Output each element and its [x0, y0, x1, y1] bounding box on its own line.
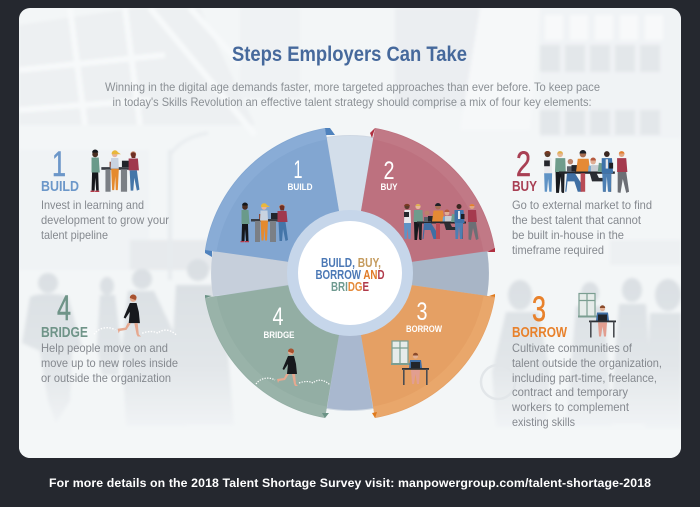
bridge description [41, 341, 178, 385]
panel: build [41, 145, 169, 242]
build wheel number: 1 [294, 156, 302, 184]
center text: BORROW AND [316, 267, 384, 282]
borrow description: workers to complement [511, 400, 630, 414]
center text: BRIDGE [331, 279, 369, 294]
build description: development to grow your [41, 213, 169, 227]
buy wheel label: BUY [380, 182, 398, 193]
segment: bridge [205, 285, 339, 418]
bridge description: Help people move on and [41, 341, 168, 355]
bridge number: 4 [57, 289, 71, 328]
build description: Invest in learning and [41, 198, 144, 212]
buy description: Go to external market to find [512, 198, 652, 212]
build heading: BUILD [41, 179, 79, 195]
buy description [512, 198, 652, 257]
center text [316, 255, 384, 294]
icon: buy team [544, 150, 629, 193]
intro text [105, 80, 600, 109]
title: Steps Employers Can Take [232, 43, 467, 66]
icon: borrow worker [391, 341, 429, 385]
bridge heading: BRIDGE [41, 325, 88, 341]
buy description: timeframe required [512, 243, 604, 257]
inner ring [287, 210, 413, 336]
build description: talent pipeline [41, 228, 108, 242]
borrow number: 3 [532, 290, 546, 329]
bridge wheel label: BRIDGE [264, 330, 294, 341]
panel: bridge [41, 289, 178, 385]
buy description: the best talent that cannot [512, 213, 642, 227]
build number: 1 [52, 145, 66, 184]
segment: buy [361, 128, 495, 262]
build description [41, 198, 169, 242]
icon: bridge runner [94, 295, 177, 337]
footer: For more details on the 2018 Talent Shortage Survey visit: manpowergroup.com/talent-shortage-2018 [49, 476, 651, 490]
segment: borrow [361, 285, 495, 418]
icon: build team [240, 202, 288, 242]
wheel diagram [205, 128, 495, 418]
buy number: 2 [516, 145, 531, 184]
buy description: be built in-house in the [512, 228, 624, 242]
icon: borrow worker [578, 294, 616, 338]
bridge wheel number: 4 [272, 303, 284, 331]
borrow description [511, 341, 662, 429]
wheel base ring [212, 135, 488, 411]
build wheel label: BUILD [288, 182, 313, 193]
borrow wheel number: 3 [416, 298, 428, 326]
intro text: in today's Skills Revolution an effective talent strategy should comprise a mix of four key elements: [112, 95, 592, 109]
panel: buy [512, 145, 652, 257]
bridge description: move up to new roles inside [41, 356, 178, 370]
segment: build [205, 128, 339, 262]
center circle [298, 221, 402, 325]
borrow description: including part-time, freelance, [512, 371, 657, 385]
icon: bridge runner [256, 348, 330, 386]
borrow wheel label: BORROW [406, 324, 442, 335]
icon: build team [91, 149, 139, 192]
icon: buy team [404, 203, 478, 240]
crowd silhouettes [22, 260, 681, 403]
borrow description: contract and temporary [512, 385, 628, 399]
borrow heading: BORROW [512, 325, 567, 341]
bridge description: or outside the organization [41, 371, 171, 385]
borrow description: talent outside the organization, [512, 356, 662, 370]
borrow description: Cultivate communities of [512, 341, 633, 355]
center text: BUILD, BUY, [321, 255, 381, 270]
borrow description: existing skills [512, 415, 575, 429]
buy wheel number: 2 [384, 157, 394, 185]
buy heading: BUY [512, 179, 537, 195]
panel: borrow [511, 290, 662, 429]
intro text: Winning in the digital age demands faster, more targeted approaches than ever before. To keep pace [105, 80, 600, 94]
